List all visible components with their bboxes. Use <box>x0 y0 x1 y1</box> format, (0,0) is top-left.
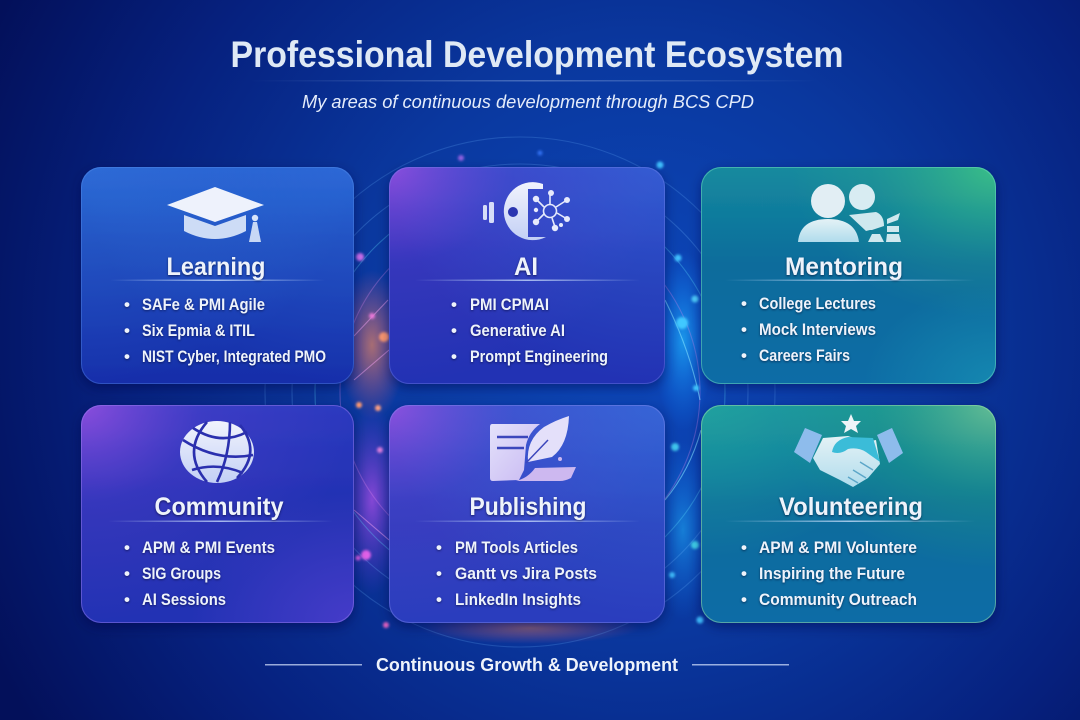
heading: Publishing <box>470 493 586 521</box>
list <box>451 295 608 366</box>
list: • <box>451 295 457 314</box>
icon: graduation cap <box>167 187 264 242</box>
list: LinkedIn Insights <box>455 590 581 609</box>
heading: Learning <box>166 253 266 281</box>
list: Careers Fairs <box>759 346 850 365</box>
title: Professional Development Ecosystem <box>230 34 844 75</box>
heading: Mentoring <box>785 253 903 281</box>
heading: Volunteering <box>779 493 923 521</box>
icon: AI head with network <box>483 182 570 240</box>
glowing orbit network behind the cards <box>265 137 775 647</box>
list: • <box>451 347 457 366</box>
list: • <box>741 320 747 339</box>
panel: Learning <box>81 167 354 384</box>
panel: Mentoring <box>701 167 996 384</box>
list: • <box>741 294 747 313</box>
list: • <box>124 564 130 583</box>
panel: AI <box>389 167 665 384</box>
list: • <box>451 321 457 340</box>
icon: globe <box>180 421 254 483</box>
panel: Community <box>81 405 354 623</box>
icon: handshake with star <box>794 414 903 487</box>
list: Gantt vs Jira Posts <box>455 564 597 583</box>
icon: mentor and student <box>798 184 901 242</box>
list: PMI CPMAI <box>470 295 549 314</box>
list: Generative AI <box>470 321 565 340</box>
list: • <box>436 538 442 557</box>
list <box>436 538 597 609</box>
list <box>741 294 876 365</box>
heading: AI <box>514 253 538 281</box>
list: • <box>124 590 130 609</box>
list <box>124 295 326 366</box>
list: PM Tools Articles <box>455 538 578 557</box>
heading: Community <box>154 493 284 521</box>
list: • <box>124 321 130 340</box>
panel: Volunteering <box>701 405 996 623</box>
list <box>741 538 917 609</box>
list: • <box>124 347 130 366</box>
list: • <box>124 538 130 557</box>
footer tagline: Continuous Growth & Development <box>376 655 678 675</box>
list: SIG Groups <box>142 564 221 583</box>
list <box>124 538 275 609</box>
list: AI Sessions <box>142 590 226 609</box>
panel: Publishing <box>389 405 665 623</box>
list: APM & PMI Events <box>142 538 275 557</box>
list: Inspiring the Future <box>759 564 905 583</box>
list: • <box>436 590 442 609</box>
list: APM & PMI Voluntere <box>759 538 917 557</box>
icon: document and quill <box>490 416 576 481</box>
list: • <box>741 346 747 365</box>
list: • <box>741 564 747 583</box>
subtitle: My areas of continuous development through BCS CPD <box>302 92 754 112</box>
title underline <box>250 80 820 82</box>
list: SAFe & PMI Agile <box>142 295 265 314</box>
list: • <box>741 590 747 609</box>
list: NIST Cyber, Integrated PMO <box>142 347 326 366</box>
list: Mock Interviews <box>759 320 876 339</box>
list: • <box>741 538 747 557</box>
list: Prompt Engineering <box>470 347 608 366</box>
list: College Lectures <box>759 294 876 313</box>
list: • <box>436 564 442 583</box>
list: • <box>124 295 130 314</box>
list: Six Epmia & ITIL <box>142 321 255 340</box>
list: Community Outreach <box>759 590 917 609</box>
